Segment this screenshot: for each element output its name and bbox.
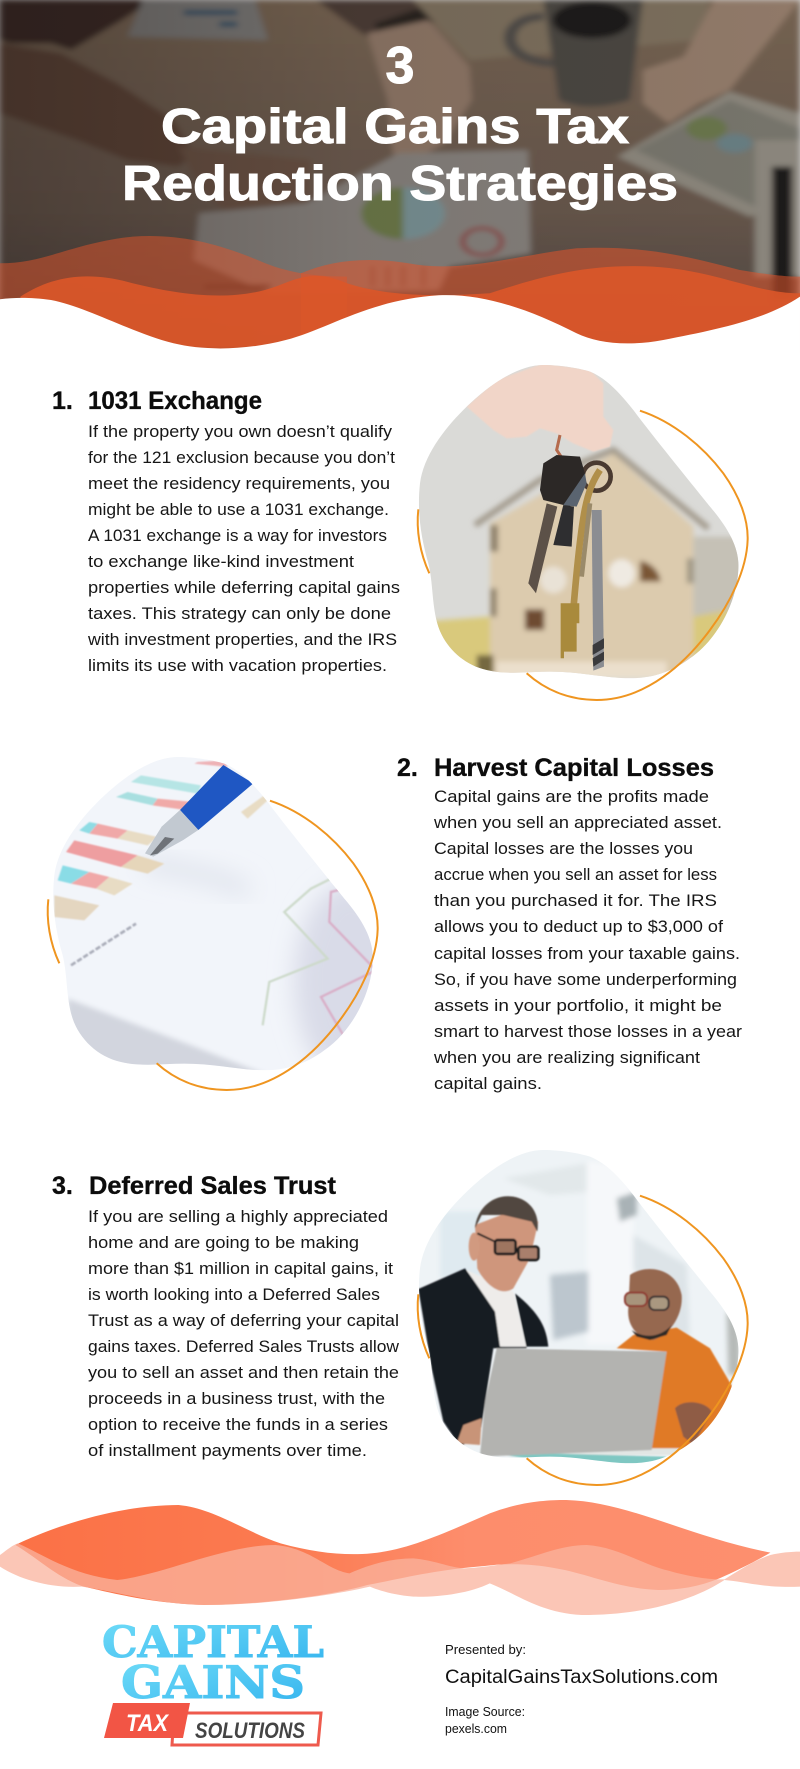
- credits: Image Source:: [445, 1705, 525, 1719]
- title: Reduction Strategies: [122, 157, 678, 211]
- body text 2: when you sell an appreciated asset.: [433, 813, 722, 832]
- header: photo banner with title: [0, 0, 800, 367]
- body text 3: [88, 1207, 400, 1460]
- body text 1: might be able to use a 1031 exchange.: [88, 500, 389, 519]
- body text 2: [433, 787, 742, 1093]
- body text 3: If you are selling a highly appreciated: [88, 1207, 388, 1226]
- body text 3: option to receive the funds in a series: [88, 1415, 388, 1434]
- photo 1: hand holding keys before house: [416, 365, 749, 701]
- title: Capital Gains Tax: [161, 100, 629, 154]
- body text 1: properties while deferring capital gains: [88, 578, 400, 597]
- heading 1: 1031 Exchange: [88, 387, 262, 415]
- heading 1: 1.: [52, 387, 73, 415]
- body text 2: Capital gains are the profits made: [434, 787, 709, 806]
- heading 3: Deferred Sales Trust: [89, 1172, 337, 1200]
- section 2: Harvest Capital Losses text: [397, 754, 742, 1093]
- heading 2: 2.: [397, 754, 418, 782]
- body text 1: limits its use with vacation properties.: [88, 656, 387, 675]
- title: 3: [386, 37, 414, 95]
- body text 1: with investment properties, and the IRS: [87, 630, 397, 649]
- orange waves: [0, 236, 800, 367]
- body text 2: than you purchased it for. The IRS: [434, 891, 717, 910]
- header photo: desk with people and charts: [0, 0, 800, 353]
- body text 1: [87, 422, 400, 675]
- credits: CapitalGainsTaxSolutions.com: [445, 1667, 718, 1688]
- body text 1: meet the residency requirements, you: [88, 474, 390, 493]
- body text 2: allows you to deduct up to $3,000 of: [434, 917, 723, 936]
- body text 2: accrue when you sell an asset for less: [434, 865, 717, 884]
- heading 3: 3.: [52, 1172, 73, 1200]
- body text 3: proceeds in a business trust, with the: [88, 1389, 385, 1408]
- body text 3: of installment payments over time.: [88, 1441, 367, 1460]
- logo: Capital Gains Tax Solutions: GAINS: [121, 1656, 305, 1709]
- section 1: 1031 Exchange text: [52, 387, 400, 675]
- body text 2: capital losses from your taxable gains.: [434, 944, 740, 963]
- title: [122, 37, 678, 211]
- logo badge: solutions: SOLUTIONS: [195, 1718, 305, 1743]
- outline 3: [418, 1196, 748, 1485]
- photo 3: two men at a laptop: [416, 1150, 749, 1486]
- logo: Capital Gains Tax Solutions: [102, 1618, 324, 1745]
- section 3: Deferred Sales Trust text: [52, 1172, 400, 1460]
- body text 1: A 1031 exchange is a way for investors: [88, 526, 387, 545]
- body text 3: gains taxes. Deferred Sales Trusts allow: [88, 1337, 400, 1356]
- body text 3: more than $1 million in capital gains, it: [88, 1259, 393, 1278]
- body text 1: to exchange like-kind investment: [88, 552, 354, 571]
- body text 3: is worth looking into a Deferred Sales: [88, 1285, 380, 1304]
- heading 2: Harvest Capital Losses: [434, 754, 714, 782]
- outline 2: [48, 801, 378, 1090]
- credits: Presented by:: [445, 1643, 526, 1657]
- body text 3: home and are going to be making: [88, 1233, 359, 1252]
- footer waves: [0, 1500, 800, 1615]
- credits: pexels.com: [445, 1722, 507, 1736]
- body text 2: Capital losses are the losses you: [434, 839, 693, 858]
- photo 2: pen on chart paper: [46, 757, 379, 1091]
- logo badge: solutions: [172, 1713, 321, 1745]
- outline 1: [418, 411, 748, 700]
- body text 2: So, if you have some underperforming: [434, 970, 737, 989]
- logo badge: tax: [104, 1703, 190, 1738]
- credits: [445, 1643, 718, 1736]
- body text 3: you to sell an asset and then retain the: [88, 1363, 399, 1382]
- body text 2: capital gains.: [434, 1074, 542, 1093]
- body text 2: when you are realizing significant: [433, 1048, 700, 1067]
- body text 1: taxes. This strategy can only be done: [88, 604, 391, 623]
- logo: Capital Gains Tax Solutions: CAPITAL: [102, 1618, 324, 1668]
- body text 1: for the 121 exclusion because you don’t: [88, 448, 395, 467]
- body text 1: If the property you own doesn’t qualify: [88, 422, 393, 441]
- body text 3: Trust as a way of deferring your capital: [88, 1311, 399, 1330]
- body text 2: assets in your portfolio, it might be: [434, 996, 722, 1015]
- body text 2: smart to harvest those losses in a year: [434, 1022, 742, 1041]
- logo badge: tax: TAX: [126, 1710, 170, 1737]
